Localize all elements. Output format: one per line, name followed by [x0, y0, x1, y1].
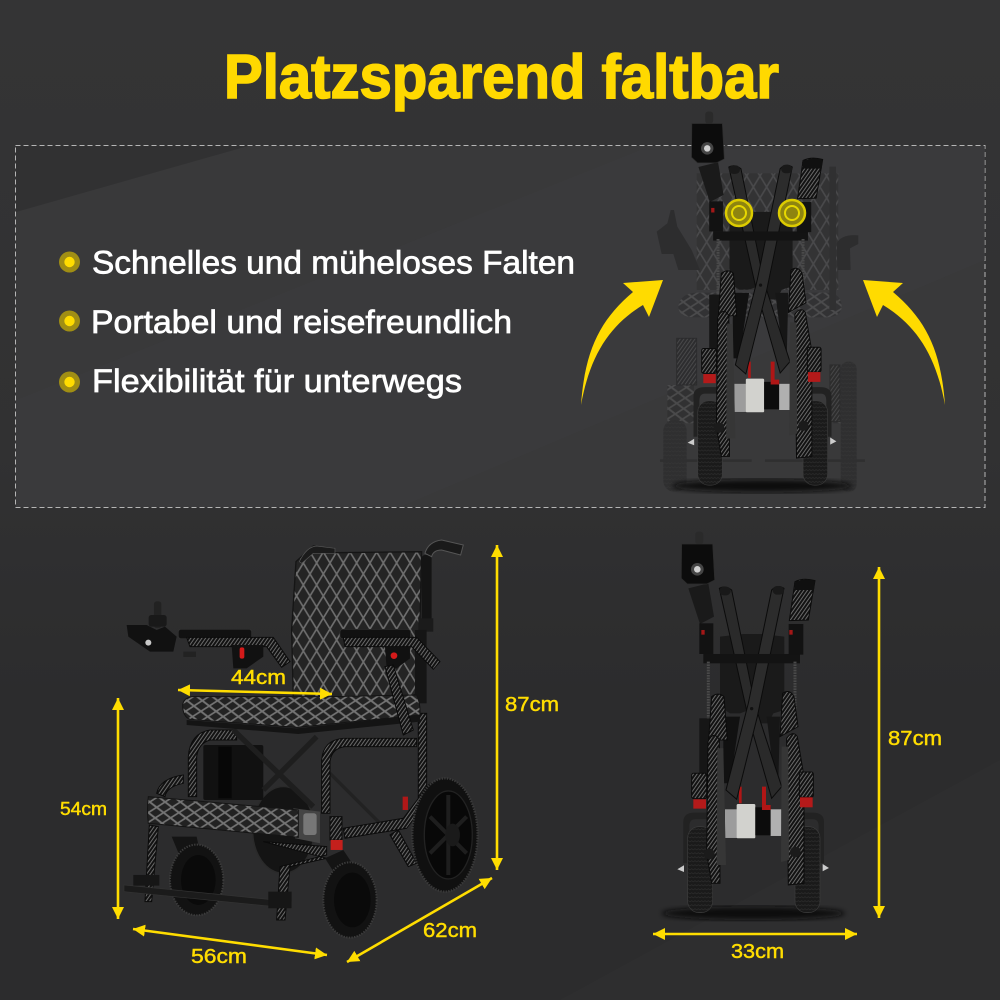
- label: seat height: 54cm: [60, 798, 107, 819]
- wheelchair folded front view: [662, 532, 845, 920]
- rear left wheel and battery: [253, 787, 314, 873]
- main back wheel: [412, 778, 478, 892]
- bullet 2: Portabel und reisefreundlich: [91, 304, 512, 340]
- icon: fold highlight rings: [726, 200, 805, 226]
- footplate: [124, 885, 292, 908]
- arrow: folded height: [878, 567, 880, 918]
- arrow: overall depth: [347, 878, 492, 962]
- near armrest: [340, 629, 440, 735]
- label: back height: 87cm: [505, 694, 559, 716]
- ghost unfolded wheelchair: [657, 167, 865, 492]
- arrow: seat width: [178, 690, 332, 694]
- bullet 1: Schnelles und müheloses Falten: [92, 244, 575, 280]
- folded wheelchair front view, top: [672, 111, 852, 492]
- arrow: overall width: [133, 929, 327, 955]
- seat cushion: [183, 695, 420, 727]
- arrow: back height: [496, 545, 498, 870]
- label: folded width: 33cm: [731, 941, 784, 963]
- label: overall width: 56cm: [191, 946, 247, 968]
- title: Platzsparend faltbar: [224, 43, 779, 112]
- wheelchair side view: [124, 540, 478, 938]
- bullet list: [59, 244, 575, 399]
- arrow: folded width: [653, 933, 857, 935]
- label: seat width: 44cm: [231, 667, 286, 689]
- hub, footplate and leg tubes: [293, 808, 320, 843]
- backrest: [292, 546, 422, 700]
- front left caster: [172, 837, 202, 867]
- bullet 3: Flexibilität für unterwegs: [92, 363, 462, 399]
- label: folded height: 87cm: [888, 728, 942, 750]
- front right caster: [330, 817, 342, 840]
- label: overall depth: 62cm: [423, 920, 477, 942]
- folding cross and frame: [233, 730, 317, 807]
- arrow: left curved: [581, 280, 663, 405]
- far armrest and joystick: [127, 601, 290, 668]
- leg rest: [147, 797, 298, 837]
- arrow: right curved: [863, 280, 945, 405]
- arrow: seat height: [117, 698, 119, 919]
- panel: folding features: [16, 111, 985, 507]
